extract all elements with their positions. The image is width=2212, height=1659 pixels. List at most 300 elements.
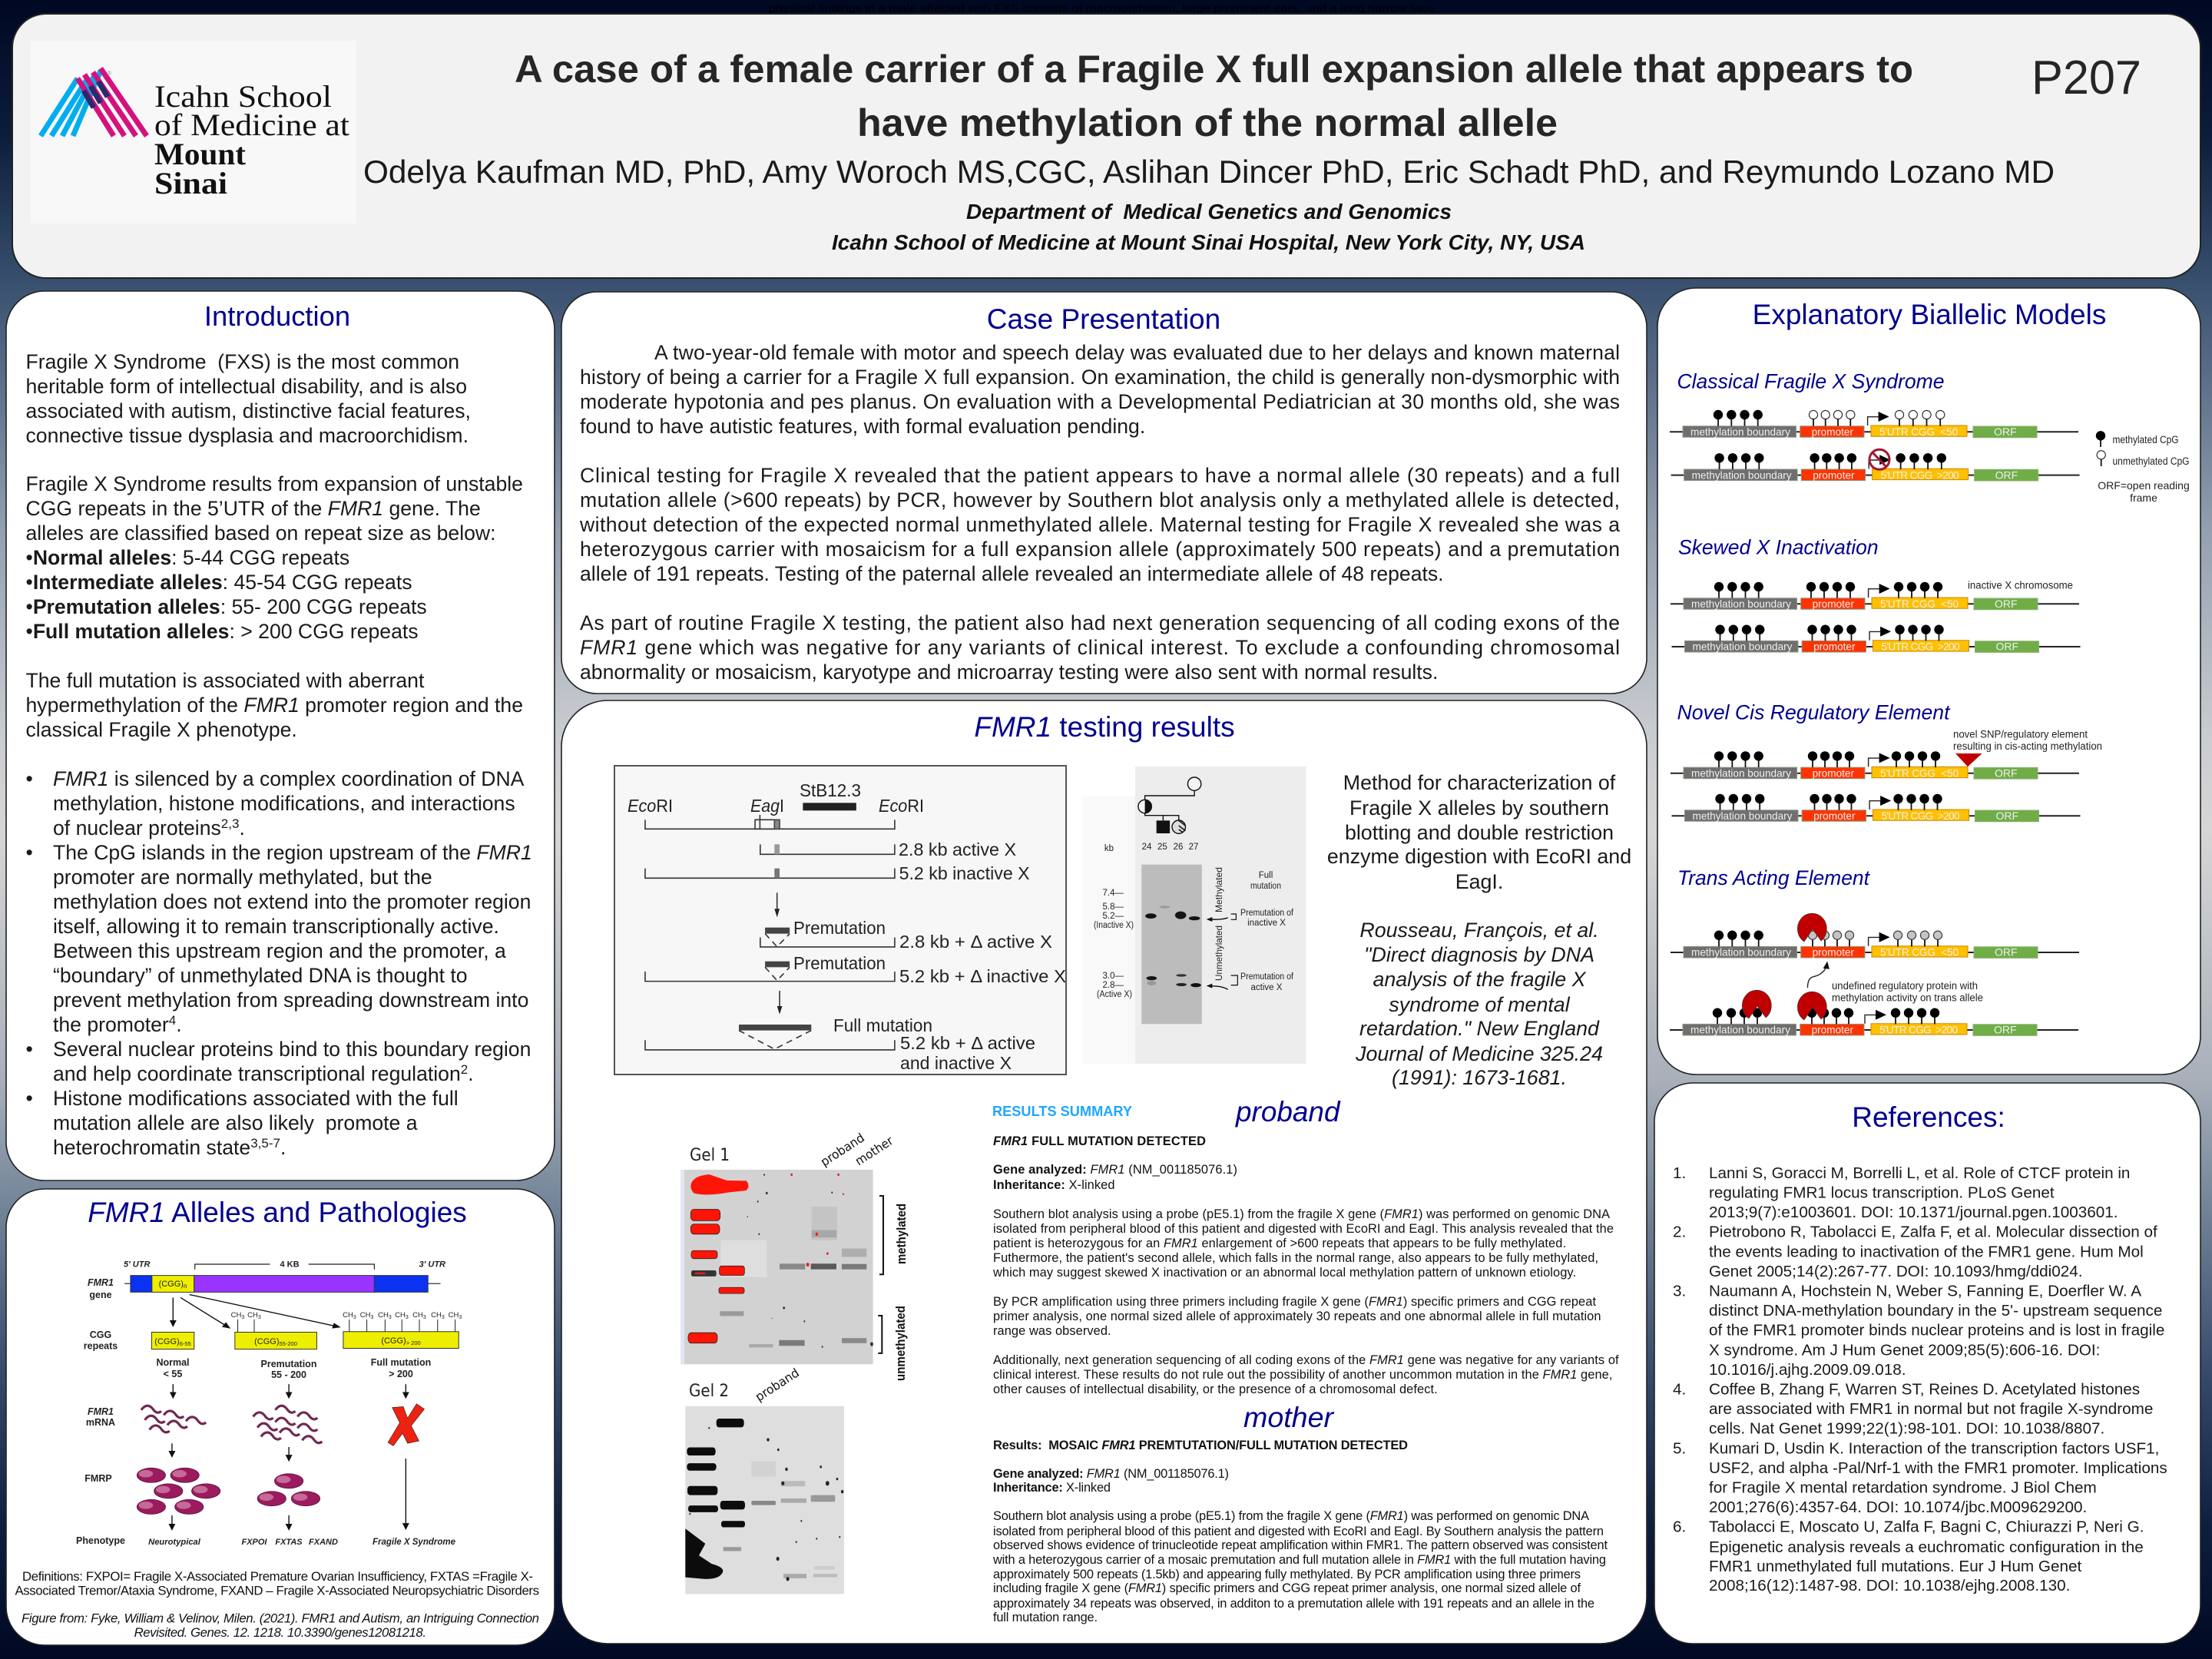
- department: Department of Medical Genetics and Genomics: [966, 200, 1452, 224]
- intro text: “boundary” of unmethylated DNA is thought to: [53, 964, 468, 987]
- figure: pedigree and Southern blot: kb: [1104, 844, 1114, 853]
- figure: pedigree and Southern blot: 25: [1157, 843, 1167, 852]
- title: A case of a female carrier of a Fragile X full expansion allele that appears to: [515, 48, 1913, 91]
- model: cis allele 1: ORF: [1995, 767, 2018, 779]
- figure: gel 1: proband: [818, 1131, 867, 1169]
- diagram labels: n: [184, 1283, 187, 1290]
- logo: Icahn School of Medicine at Mount Sinai: Icahn School: [154, 79, 332, 114]
- intro text: .: [280, 1136, 286, 1159]
- figure: pedigree and Southern blot: [1083, 767, 1306, 1064]
- reference list: 1.: [1673, 1164, 1686, 1182]
- results summary: proband: clinical interest. These results do not rule out the possibility of another uncommon mutation in the FMR1 gene,: [993, 1368, 1612, 1382]
- results summary: proband: By PCR amplification using three primers including fragile X gene (FMR1) specific primers and CGG repeat: [993, 1295, 1596, 1309]
- intro text: .: [468, 1062, 474, 1085]
- model: cis allele 1: [1671, 751, 2079, 779]
- figure: pedigree and Southern blot: 5.2—: [1103, 912, 1124, 921]
- figure: pedigree and Southern blot: Full: [1259, 871, 1273, 880]
- icon: blocked transcription: [1869, 449, 1889, 469]
- intro text: 2,3: [221, 816, 239, 831]
- diagram labels: CGG: [90, 1330, 111, 1340]
- figure: restriction map: 5.2 kb + Δ inactive X: [899, 966, 1066, 986]
- diagram labels: Premutation: [261, 1359, 316, 1369]
- icon: regulatory protein on promoter: [1797, 992, 1826, 1020]
- intro text: CGG repeats in the 5’UTR of the FMR1 gene. The: [26, 497, 481, 520]
- reference list: regulating FMR1 locus transcription. PLoS Genet: [1709, 1184, 2055, 1201]
- model: classical expanded allele: [1671, 453, 2080, 481]
- figure: pedigree and Southern blot: 27: [1189, 843, 1198, 852]
- model: skewed allele 2: 5'UTR CGG >200: [1882, 641, 1960, 653]
- model: skewed allele 2: ORF: [1995, 641, 2018, 653]
- figure: gel 2: Gel 2: [689, 1382, 729, 1401]
- diagram labels: 55 - 200: [271, 1369, 306, 1380]
- title: [515, 48, 1913, 144]
- figure: pedigree and Southern blot: Methylated: [1214, 867, 1224, 912]
- figure: pedigree and Southern blot: Unmethylated: [1214, 926, 1224, 981]
- diagram labels: 3: [258, 1315, 261, 1320]
- model: trans allele 2: ORF: [1994, 1024, 2017, 1036]
- case text: abnormality or mosaicism, karyotype and microarray testing were also sent with normal results.: [580, 661, 1438, 684]
- intro text: of nuclear proteins: [53, 816, 221, 839]
- results summary: mother: including fragile X gene (FMR1) specific primers and CGG repeat primer analysis, one normal sized allele of: [993, 1581, 1581, 1595]
- poster number: P207: [2032, 51, 2141, 104]
- figure: restriction map: [614, 766, 1066, 1075]
- diagram labels: CH: [378, 1311, 389, 1320]
- figure: restriction map: EcoRI: [879, 796, 924, 816]
- reference list: Naumann A, Hochstein N, Weber S, Fanning E, Doerfler W. A: [1709, 1283, 2141, 1300]
- hidden overflow text line at top: physical findings in a male affected with FXS consists of macroorchidism, large prominent ears, and a long narrow face: [769, 2, 1434, 14]
- model: trans allele 2: promoter: [1812, 1025, 1853, 1036]
- figure: pedigree and Southern blot: 2.8—: [1103, 981, 1124, 990]
- label: inactive X: inactive X chromosome: [1968, 580, 2073, 591]
- diagram labels: CH: [412, 1311, 423, 1320]
- figure: pedigree and Southern blot: 5.8—: [1103, 902, 1124, 912]
- case text: [579, 341, 1620, 684]
- intro text: Fragile X Syndrome results from expansion of unstable: [26, 472, 523, 495]
- method citation: retardation." New England: [1359, 1017, 1600, 1040]
- subheading: novel cis: Novel Cis Regulatory Element: [1677, 701, 1951, 724]
- results summary: proband: isolated from peripheral blood of this patient and digested with EcoRI and EagI. This analysis revealed that the: [993, 1222, 1614, 1236]
- diagram labels: Neurotypical: [148, 1538, 201, 1547]
- figure: gel 1: unmethylated: [893, 1306, 908, 1381]
- diagram labels: CH: [360, 1311, 371, 1320]
- model: classical normal allele: ORF: [1994, 426, 2017, 438]
- intro text: classical Fragile X phenotype.: [26, 718, 297, 741]
- intro text: [26, 350, 532, 1159]
- diagram labels: 3: [406, 1315, 409, 1320]
- reference list: Pietrobono R, Tabolacci E, Zalfa F, et al. Molecular dissection of: [1709, 1223, 2157, 1241]
- figure: pedigree and Southern blot: 26: [1174, 843, 1183, 852]
- method caption: [1327, 771, 1631, 893]
- model: trans allele 2: 5'UTR CGG >200: [1879, 1025, 1958, 1036]
- case text: without detection of the expected normal unmethylated allele. Maternal testing for Fragile X revealed she was a: [579, 513, 1620, 536]
- intro text: Histone modifications associated with the full: [53, 1087, 459, 1110]
- panel: header: [12, 14, 2200, 278]
- method citation: Rousseau, François, et al.: [1359, 919, 1599, 942]
- diagram labels: 3: [371, 1315, 374, 1320]
- diagram labels: CH: [431, 1311, 442, 1320]
- model: cis allele 1: 5'UTR CGG <50: [1880, 767, 1959, 779]
- diagram labels: 3: [389, 1315, 392, 1320]
- panel: explanatory biallelic models: [1657, 288, 2200, 1075]
- reference list: Kumari D, Usdin K. Interaction of the transcription factors USF1,: [1709, 1439, 2159, 1458]
- method caption: EagI.: [1455, 870, 1503, 893]
- reference list: 10.1016/j.ajhg.2009.09.018.: [1709, 1361, 1906, 1379]
- figure: restriction map: Premutation: [793, 953, 886, 973]
- figure citation: [22, 1611, 539, 1640]
- case text: heterozygous carrier with mosaicism for a full expansion allele (approximately 500 repeats) and a premutation: [580, 538, 1620, 561]
- model: trans allele 1: ORF: [1995, 946, 2018, 959]
- results summary: mother: Gene analyzed: FMR1 (NM_001185076.1): [993, 1467, 1229, 1481]
- heading: introduction: Introduction: [204, 300, 350, 332]
- model: cis allele 1: promoter: [1813, 767, 1854, 779]
- model: skewed allele 1: 5'UTR CGG <50: [1880, 598, 1959, 610]
- title: have methylation of the normal allele: [857, 101, 1558, 144]
- model: classical expanded allele: promoter: [1813, 469, 1855, 481]
- label: novel SNP: novel SNP/regulatory element: [1953, 729, 2088, 740]
- reference list: 2001;276(6):4357-64. DOI: 10.1074/jbc.M009629200.: [1709, 1498, 2087, 1516]
- figure: pedigree and Southern blot: 3.0—: [1103, 972, 1124, 981]
- legend: unmethylated CpG: [2112, 455, 2189, 467]
- subheading: classical: Classical Fragile X Syndrome: [1677, 370, 1945, 393]
- results summary: proband: Additionally, next generation sequencing of all coding exons of the FMR1 gene was negative for any variants of: [993, 1353, 1619, 1367]
- label: novel SNP: [1953, 729, 2102, 752]
- figure: pedigree and Southern blot: Premutation of: [1240, 909, 1294, 918]
- label: novel SNP: resulting in cis-acting methylation: [1953, 740, 2102, 752]
- figure: gel 1: [680, 1131, 909, 1381]
- intro text: •: [26, 1038, 33, 1061]
- method citation: (1991): 1673-1681.: [1392, 1066, 1567, 1089]
- model: classical normal allele: methylation boundary: [1690, 426, 1790, 438]
- icon: regulatory protein on boundary: [1742, 990, 1771, 1018]
- results summary: proband: FMR1 FULL MUTATION DETECTED: [993, 1134, 1206, 1148]
- panel: introduction: [6, 291, 555, 1181]
- figure: restriction map: EagI: [750, 796, 784, 816]
- figure: pedigree and Southern blot: (Inactive X): [1094, 921, 1134, 930]
- label: undefined regulatory protein: methylation activity on trans allele: [1832, 992, 1983, 1004]
- logo: Icahn School of Medicine at Mount Sinai: [31, 41, 356, 224]
- diagram labels: CH: [343, 1311, 353, 1320]
- heading: explanatory models: Explanatory Biallelic Models: [1753, 299, 2106, 330]
- results summary: mother: isolated from peripheral blood of this patient and digested with EcoRI and EagI. By Southern analysis the pattern: [993, 1525, 1604, 1538]
- case text: As part of routine Fragile X testing, the patient also had next generation sequencing of all coding exons of the: [580, 611, 1620, 634]
- intro text: 2: [461, 1062, 468, 1077]
- subheading: trans acting: Trans Acting Element: [1677, 866, 1870, 889]
- figure: restriction map: 5.2 kb inactive X: [899, 863, 1030, 883]
- logo: Icahn School of Medicine at Mount Sinai: ®: [107, 70, 111, 77]
- diagram labels: 5' UTR: [124, 1260, 150, 1269]
- results summary: mother: Inheritance: X-linked: [993, 1481, 1111, 1495]
- reference list: [1673, 1164, 2167, 1594]
- figure: gel 2: proband: [753, 1366, 802, 1404]
- intro text: heritable form of intellectual disability, and is also: [26, 375, 467, 398]
- reference list: Tabolacci E, Moscato U, Zalfa F, Bagni C, Chiurazzi P, Neri G.: [1709, 1518, 2144, 1536]
- figure: pedigree and Southern blot: mutation: [1250, 882, 1281, 891]
- diagram labels: CH: [449, 1311, 459, 1320]
- label: undefined regulatory protein: undefined regulatory protein with: [1832, 980, 1978, 992]
- method caption: blotting and double restriction: [1345, 821, 1614, 844]
- institution: Icahn School of Medicine at Mount Sinai Hospital, New York City, NY, USA: [832, 230, 1585, 254]
- reference list: Lanni S, Goracci M, Borrelli L, et al. Role of CTCF protein in: [1709, 1164, 2130, 1182]
- model: classical normal allele: promoter: [1812, 426, 1853, 438]
- model: classical expanded allele: methylation boundary: [1692, 469, 1792, 481]
- figure: restriction map: StB12.3: [800, 780, 861, 800]
- results summary: proband: RESULTS SUMMARY: [992, 1103, 1132, 1119]
- model: trans allele 1: [1671, 931, 2079, 959]
- intro text: •: [26, 767, 33, 790]
- results summary: proband: proband: [1235, 1096, 1341, 1128]
- model: classical normal allele: [1670, 410, 2078, 438]
- arrow: trans regulation: [1807, 962, 1827, 988]
- model: cis allele 2: 5'UTR CGG >200: [1882, 810, 1960, 822]
- reference list: of the FMR1 promoter binds nuclear proteins and is lost in fragile: [1709, 1321, 2164, 1339]
- reference list: X syndrome. Am J Hum Genet 2009;85(5):606-16. DOI:: [1709, 1341, 2100, 1359]
- heading: case presentation: Case Presentation: [987, 303, 1220, 335]
- diagram labels: Fragile X Syndrome: [373, 1538, 456, 1547]
- method caption: enzyme digestion with EcoRI and: [1327, 845, 1631, 868]
- intro text: methylation, histone modifications, and interactions: [53, 792, 515, 815]
- model: skewed allele 1: promoter: [1813, 598, 1854, 610]
- case text: allele of 191 repeats. Testing of the paternal allele revealed an intermediate allele of 48 repeats.: [580, 562, 1444, 585]
- intro text: promoter are normally methylated, but the: [53, 866, 432, 889]
- results summary: mother: mother: [1243, 1402, 1335, 1433]
- panel: FMR1 alleles and pathologies: [6, 1189, 555, 1645]
- method citation: "Direct diagnosis by DNA: [1364, 943, 1594, 966]
- diagram labels: (CGG): [159, 1280, 184, 1289]
- intro text: .: [239, 816, 245, 839]
- model: skewed allele 1: ORF: [1995, 598, 2018, 610]
- diagram labels: (CGG): [154, 1337, 180, 1346]
- results summary: proband: [992, 1096, 1619, 1396]
- figure: gel 1: Gel 1: [690, 1146, 730, 1165]
- diagram labels: FMR1: [88, 1406, 114, 1417]
- legend: frame: [2130, 492, 2157, 504]
- model: skewed allele 2: [1671, 625, 2080, 653]
- reference list: Coffee B, Zhang F, Warren ST, Reines D. Acetylated histones: [1709, 1381, 2140, 1398]
- heading: references: References:: [1852, 1101, 2005, 1133]
- figure: restriction map: EcoRI: [628, 796, 673, 816]
- intro text: 4: [169, 1013, 176, 1028]
- legend: methylated CpG: [2112, 434, 2178, 445]
- icon: regulatory element triangle: [1955, 753, 1982, 767]
- model: cis allele 2: methylation boundary: [1693, 810, 1793, 822]
- intro text: alleles are classified based on repeat size as below:: [26, 522, 496, 545]
- panel: references: [1654, 1083, 2200, 1644]
- heading: FMR1 testing results: FMR1 testing results: [974, 711, 1235, 743]
- authors: Odelya Kaufman MD, PhD, Amy Woroch MS,CGC, Aslihan Dincer PhD, Eric Schadt PhD, and Reymundo Lozano MD: [363, 154, 2055, 190]
- diagram labels: Normal: [156, 1357, 190, 1368]
- results summary: mother: [992, 1402, 1608, 1624]
- case text: Clinical testing for Fragile X revealed that the patient appears to have a normal allele (30 repeats) and a full: [580, 464, 1620, 487]
- reference list: 3.: [1673, 1283, 1686, 1300]
- results summary: mother: full mutation range.: [993, 1611, 1098, 1624]
- results summary: mother: Results: MOSAIC FMR1 PREMTUTATION/FULL MUTATION DETECTED: [993, 1439, 1408, 1452]
- intro text: heterochromatin state: [53, 1136, 250, 1159]
- model: classical normal allele: 5'UTR CGG <50: [1879, 426, 1958, 438]
- model: cis allele 2: ORF: [1995, 810, 2018, 822]
- intro text: Several nuclear proteins bind to this boundary region: [53, 1038, 531, 1061]
- reference list: Epigenetic analysis reveals a euchromatic configuration in the: [1709, 1538, 2144, 1556]
- reference list: 2013;9(7):e1003601. DOI: 10.1371/journal.pgen.1003601.: [1709, 1204, 2118, 1221]
- diagram labels: (CGG): [381, 1336, 406, 1346]
- figure: restriction map: Premutation: [793, 918, 886, 938]
- results summary: mother: approximately 500 repeats (1.5kb) and appearing fully methylated. By PCR amplification using three primers: [993, 1568, 1581, 1581]
- case text: moderate hypotonia and pes planus. On evaluation with a Developmental Pediatrician at 30 months old, she was: [580, 390, 1620, 413]
- method citation: analysis of the fragile X: [1373, 968, 1587, 991]
- reference list: FMR1 unmethylated full mutations. Eur J Hum Genet: [1709, 1558, 2081, 1575]
- reference list: 5.: [1673, 1439, 1686, 1458]
- diagram labels: Phenotype: [76, 1535, 125, 1546]
- diagram labels: CH: [247, 1311, 258, 1320]
- intro text: •Premutation alleles: 55- 200 CGG repeats: [26, 595, 427, 618]
- case text: A two-year-old female with motor and speech delay was evaluated due to her delays and known maternal: [654, 341, 1620, 364]
- method citation: [1355, 919, 1603, 1089]
- reference list: 6.: [1673, 1518, 1686, 1536]
- diagram labels: FXAND: [309, 1538, 338, 1547]
- method citation: Journal of Medicine 325.24: [1355, 1042, 1603, 1065]
- case text: mutation allele (>600 repeats) by PCR, however by Southern blot analysis only a methylated allele is detected,: [580, 488, 1620, 512]
- intro text: connective tissue dysplasia and macroorchidism.: [26, 424, 469, 447]
- diagram labels: 3: [353, 1315, 356, 1320]
- diagram labels: Full mutation: [371, 1357, 431, 1368]
- heading: FMR1 alleles: FMR1 Alleles and Pathologies: [88, 1197, 467, 1228]
- legend: ORF=open reading: [2098, 479, 2190, 492]
- model: skewed allele 1: methylation boundary: [1691, 598, 1791, 610]
- logo: Icahn School of Medicine at Mount Sinai: Sinai: [154, 166, 227, 200]
- intro text: mutation allele are also likely promote a: [53, 1111, 418, 1134]
- subheading: skewed X: Skewed X Inactivation: [1678, 536, 1879, 559]
- method caption: Method for characterization of: [1343, 771, 1616, 794]
- method caption: Fragile X alleles by southern: [1349, 796, 1609, 820]
- diagram labels: 3: [442, 1315, 445, 1320]
- intro text: •: [26, 841, 33, 864]
- diagram labels: > 200: [389, 1369, 413, 1379]
- model: cis allele 2: [1671, 794, 2080, 822]
- diagram labels: 3: [423, 1315, 426, 1320]
- diagram labels: mRNA: [86, 1417, 115, 1428]
- results summary: mother: with a heterozygous carrier of a mosaic premutation and full mutation allele in FMR1 with the full mutation having: [992, 1553, 1606, 1567]
- reference list: 2.: [1673, 1223, 1686, 1241]
- figure: restriction map: 5.2 kb + Δ active: [900, 1033, 1035, 1053]
- figure: pedigree and Southern blot: active X: [1251, 983, 1283, 992]
- figure: restriction map: 2.8 kb active X: [899, 839, 1016, 859]
- definitions text: [15, 1569, 539, 1598]
- model: classical expanded allele: 5'UTR CGG >200: [1881, 469, 1959, 481]
- results summary: proband: Southern blot analysis using a probe (pE5.1) from the fragile X gene (FMR1) was performed on genomic DNA: [993, 1207, 1610, 1221]
- icon: regulatory protein on allele 1: [1797, 913, 1826, 942]
- reference list: distinct DNA-methylation boundary in the 5'- upstream sequence: [1709, 1302, 2162, 1320]
- figure: restriction map: 2.8 kb + Δ active X: [899, 932, 1052, 952]
- reference list: 4.: [1673, 1381, 1686, 1398]
- intro text: •Intermediate alleles: 45-54 CGG repeats: [26, 571, 412, 594]
- diagram labels: FMR1: [88, 1277, 114, 1288]
- case text: found to have autistic features, with formal evaluation pending.: [580, 415, 1145, 438]
- intro text: The CpG islands in the region upstream of the FMR1: [53, 841, 532, 864]
- intro text: associated with autism, distinctive facial features,: [26, 399, 471, 422]
- diagram labels: 6-55: [180, 1340, 191, 1347]
- figure: gel 2: [685, 1366, 844, 1594]
- reference list: are associated with FMR1 in normal but not fragile X-syndrome: [1709, 1400, 2153, 1418]
- model: trans allele 1: methylation boundary: [1691, 947, 1791, 959]
- diagram labels: > 200: [406, 1339, 421, 1346]
- results summary: proband: Futhermore, the patient's second allele, which falls in the normal range, also appears to be fully methylated,: [993, 1251, 1598, 1265]
- intro text: •: [26, 1087, 33, 1110]
- reference list: 2008;16(12):1487-98. DOI: 10.1038/ejhg.2008.130.: [1709, 1577, 2070, 1594]
- intro text: FMR1 is silenced by a complex coordination of DNA: [53, 767, 525, 790]
- model: cis allele 1: methylation boundary: [1691, 767, 1791, 779]
- figure: gel 1: methylated: [894, 1204, 909, 1264]
- diagram labels: < 55: [164, 1369, 182, 1379]
- definitions text: Associated Tremor/Ataxia Syndrome, FXAND – Fragile X-Associated Neuropsychiatric Disorders: [15, 1584, 539, 1598]
- model: trans allele 2: methylation boundary: [1690, 1025, 1790, 1036]
- model: skewed allele 1: [1671, 582, 2079, 610]
- reference list: Genet 2005;14(2):267-77. DOI: 10.1093/hmg/ddi024.: [1709, 1263, 2083, 1280]
- diagram labels: 3: [459, 1315, 462, 1320]
- figure: pedigree and Southern blot: 24: [1142, 843, 1152, 852]
- intro text: Between this upstream region and the promoter, a: [53, 939, 506, 962]
- figure: restriction map: and inactive X: [900, 1053, 1012, 1073]
- case text: history of being a carrier for a Fragile X full expansion. On examination, the child is generally non-dysmorphic with: [580, 366, 1620, 389]
- reference list: USF2, and alpha -Pal/Nrf-1 with the FMR1 promoter. Implications: [1709, 1459, 2167, 1477]
- intro text: •Full mutation alleles: > 200 CGG repeats: [26, 620, 419, 643]
- intro text: •Normal alleles: 5-44 CGG repeats: [26, 546, 349, 569]
- intro text: itself, allowing it to remain transcriptionally active.: [53, 915, 499, 938]
- diagram labels: 4 KB: [280, 1260, 300, 1269]
- reference list: the events leading to inactivation of the FMR1 gene. Hum Mol: [1709, 1243, 2144, 1261]
- diagram labels: gene: [89, 1290, 112, 1300]
- panel: FMR1 testing results: [561, 700, 1647, 1644]
- figure citation: Revisited. Genes. 12. 1218. 10.3390/genes12081218.: [134, 1625, 426, 1640]
- diagram labels: repeats: [84, 1341, 118, 1352]
- intro text: the promoter: [53, 1013, 169, 1036]
- model: skewed allele 2: promoter: [1813, 641, 1856, 653]
- figure citation: Figure from: Fyke, William & Velinov, Milen. (2021). FMR1 and Autism, an Intriguing Connection: [22, 1611, 539, 1626]
- diagram labels: CH: [395, 1311, 406, 1320]
- logo: Icahn School of Medicine at Mount Sinai: of Medicine at: [154, 108, 349, 142]
- diagram labels: FXPOI: [241, 1538, 267, 1547]
- diagram labels: FMRP: [84, 1473, 112, 1484]
- figure: gel 1: mother: [853, 1133, 896, 1168]
- model: classical expanded allele: ORF: [1995, 469, 2018, 481]
- diagram labels: FXTAS: [275, 1538, 303, 1547]
- model: skewed allele 2: methylation boundary: [1693, 641, 1793, 653]
- diagram labels: 3' UTR: [419, 1260, 445, 1269]
- results summary: mother: Southern blot analysis using a probe (pE5.1) from the fragile X gene (FMR1) was performed on genomic DNA: [993, 1509, 1589, 1523]
- definitions text: Definitions: FXPOI= Fragile X-Associated Premature Ovarian Insufficiency, FXTAS =Fragile X-: [22, 1569, 533, 1584]
- reference list: for Fragile X mental retardation syndrome. J Biol Chem: [1709, 1479, 2097, 1496]
- intro text: prevent methylation from spreading downstream into: [53, 988, 528, 1012]
- intro text: The full mutation is associated with aberrant: [26, 669, 425, 692]
- results summary: proband: Inheritance: X-linked: [993, 1178, 1115, 1192]
- intro text: .: [176, 1013, 182, 1036]
- model: trans allele 1: promoter: [1813, 947, 1854, 959]
- model: trans allele 1: 5'UTR CGG <50: [1880, 947, 1959, 959]
- results summary: proband: other causes of intellectual disability, or the presence of a chromosomal defect.: [993, 1382, 1438, 1396]
- method citation: syndrome of mental: [1389, 993, 1571, 1016]
- results summary: mother: observed shows evidence of trinucleotide repeat amplification within FMR1. The pattern observed was consistent: [993, 1538, 1608, 1552]
- intro text: 3,5-7: [250, 1136, 280, 1151]
- figure: pedigree and Southern blot: (Active X): [1097, 990, 1132, 999]
- results summary: proband: primer analysis, one normal sized allele of approximately 30 repeats and one abnormal allele in full mutation: [993, 1310, 1601, 1323]
- results summary: mother: approximately 34 repeats was observed, in additon to a premutation allele with 191 repeats and an allele in the: [993, 1597, 1594, 1611]
- figure: restriction map: Full mutation: [833, 1015, 932, 1035]
- logo: Icahn School of Medicine at Mount Sinai: Mount: [154, 137, 247, 171]
- reference list: cells. Nat Genet 1999;22(1):98-101. DOI: 10.1038/8807.: [1709, 1419, 2104, 1438]
- label: undefined regulatory protein: [1832, 980, 1983, 1004]
- results summary: proband: patient is heterozygous for an FMR1 enlargement of >600 repeats that appears to be fully methylated.: [993, 1237, 1566, 1250]
- diagram labels: (CGG): [254, 1337, 280, 1346]
- intro text: hypermethylation of the FMR1 promoter region and the: [26, 694, 523, 717]
- diagram labels: [76, 1260, 462, 1547]
